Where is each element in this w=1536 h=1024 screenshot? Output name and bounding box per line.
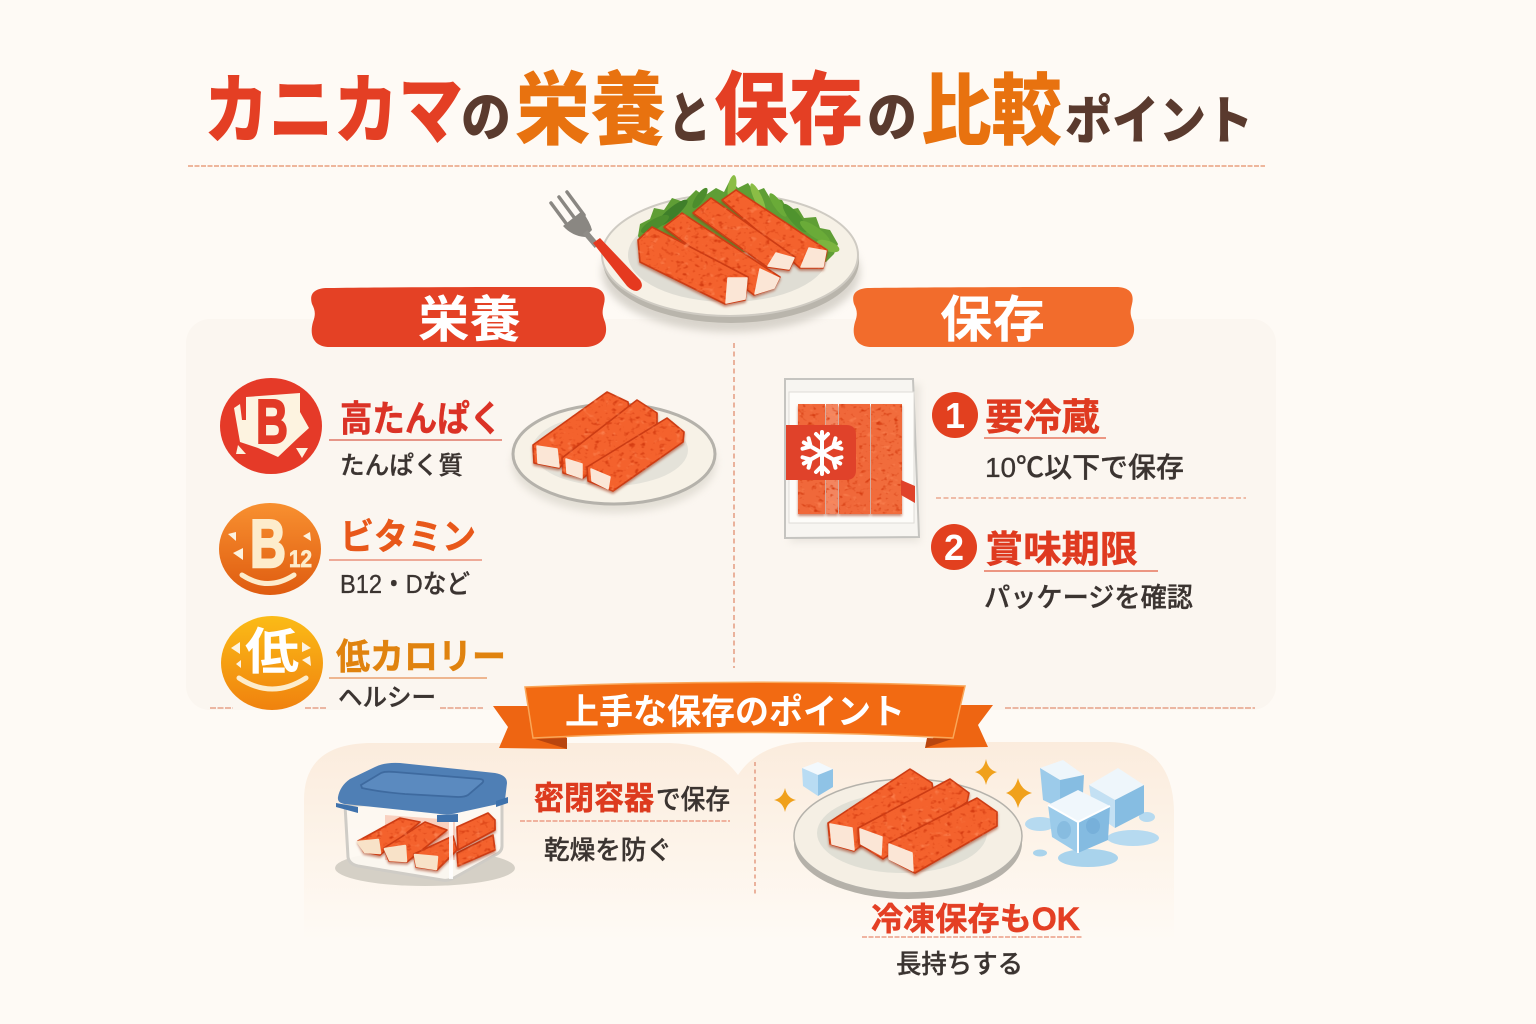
icon: sparkles <box>774 759 1032 812</box>
item: refrigerate <box>932 392 1184 483</box>
item: low calorie <box>221 616 506 712</box>
tip: freezer text <box>862 901 1083 979</box>
icon: protein badge <box>220 378 322 474</box>
title: の <box>461 88 511 148</box>
panel: storage tips background <box>304 742 1174 940</box>
icon: crab stick package with snowflake label <box>785 379 920 542</box>
item: expiry date: 賞味期限 <box>985 529 1138 570</box>
icon: vitamin B12 badge: 12 <box>289 546 312 573</box>
panel: comparison background <box>186 319 1276 710</box>
item: expiry date <box>931 524 1193 613</box>
heading: storage pill <box>853 287 1134 348</box>
tip: airtight container text <box>520 780 730 865</box>
plate <box>602 194 859 323</box>
item: vitamins <box>219 503 482 599</box>
heading: storage pill: 保存 <box>940 292 1045 348</box>
item: low calorie: ヘルシー <box>338 684 436 712</box>
heading: nutrition pill: 栄養 <box>418 292 521 348</box>
icon: frozen plate with crab sticks <box>794 769 1022 899</box>
icon: plate with three crab sticks <box>512 392 716 513</box>
number 2 <box>931 524 977 570</box>
number 1 <box>932 392 978 438</box>
number 1: 1 <box>945 395 965 436</box>
number 2: 2 <box>944 527 964 568</box>
heading: nutrition pill <box>311 287 606 348</box>
icon: vitamin B12 badge <box>219 503 321 595</box>
title: ポイント <box>1065 93 1253 151</box>
title <box>204 66 1253 155</box>
icon: low calorie badge <box>221 616 323 710</box>
snowflake label <box>786 425 856 480</box>
tip: freezer text: 長持ちする <box>896 949 1023 979</box>
item: expiry date: パッケージを確認 <box>984 583 1193 613</box>
item: refrigerate: 要冷蔵 <box>985 397 1100 438</box>
title: カニカマ <box>204 69 463 154</box>
item: high protein <box>220 378 502 480</box>
icon: ice cubes <box>802 760 1159 867</box>
icon: low calorie badge: 低 <box>245 624 299 680</box>
item: vitamins: ビタミン <box>340 516 476 557</box>
title: と <box>668 87 711 150</box>
lid <box>336 763 508 822</box>
tip: airtight container text: 密閉容器 <box>534 780 654 816</box>
item: refrigerate: 10℃以下で保存 <box>985 452 1184 483</box>
icon: storage container <box>335 763 515 886</box>
title: 比較 <box>921 67 1062 155</box>
title: の <box>867 88 917 148</box>
ribbon banner: storage tips: 上手な保存のポイント <box>565 693 905 732</box>
icon: protein badge: B <box>256 388 288 457</box>
item: high protein: 高たんぱく <box>340 398 502 439</box>
ribbon banner: storage tips <box>493 682 993 749</box>
tip: airtight container text: で保存 <box>656 785 730 815</box>
item: low calorie: 低カロリー <box>336 636 506 677</box>
item: vitamins: B12・Dなど <box>340 569 470 599</box>
title: 保存 <box>714 66 863 155</box>
title: 栄養 <box>515 66 666 155</box>
crab sticks <box>638 190 827 304</box>
tip: airtight container text: 乾燥を防ぐ <box>544 835 672 865</box>
tip: freezer text: 冷凍保存もOK <box>871 901 1080 937</box>
icon: plate of crab sticks with fork <box>551 174 860 332</box>
icon: vitamin B12 badge: B <box>250 506 286 582</box>
lettuce <box>638 174 841 262</box>
item: high protein: たんぱく質 <box>340 452 463 480</box>
fork <box>551 192 642 291</box>
